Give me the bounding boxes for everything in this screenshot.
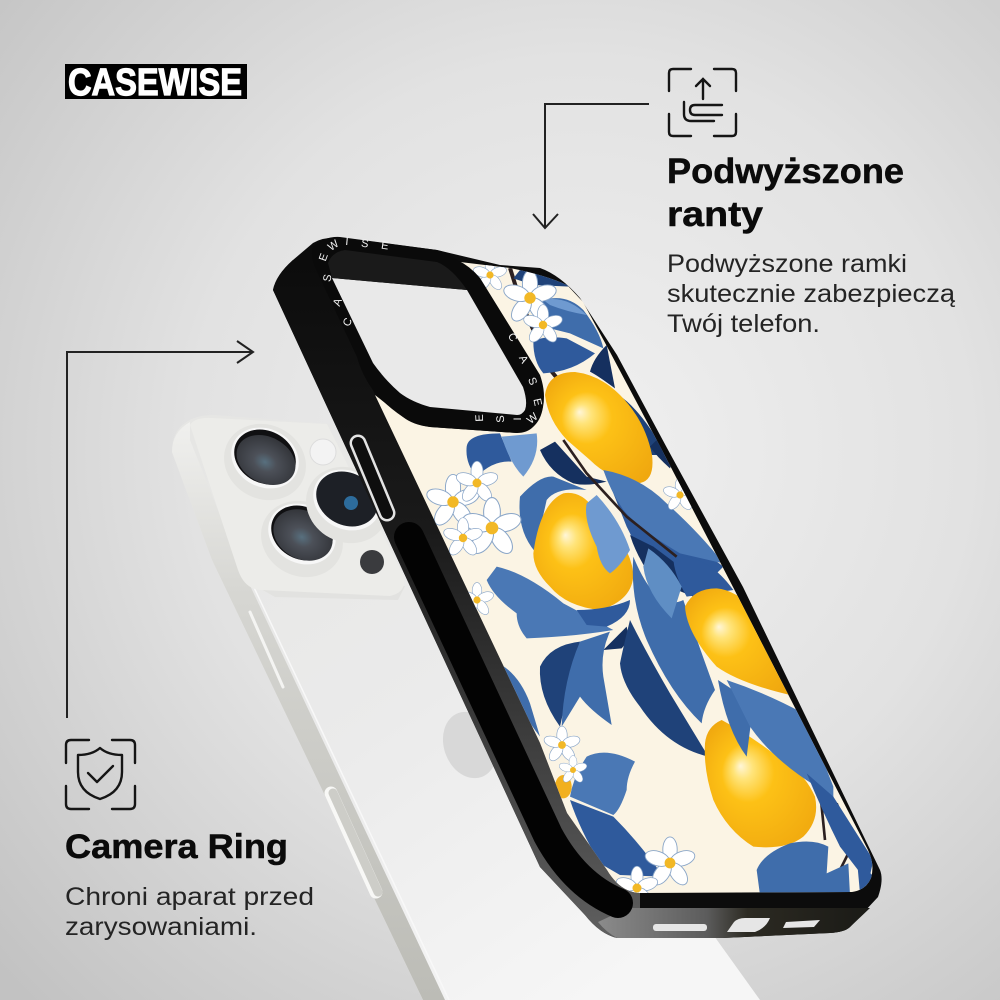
bottom wall	[598, 908, 870, 938]
case shell	[273, 238, 882, 938]
branches	[508, 268, 558, 378]
ring engraving: S	[321, 274, 335, 283]
icon: raised edge	[669, 69, 736, 136]
brand logo: CASEWISE	[68, 62, 242, 104]
ring engraving: C	[505, 331, 519, 344]
camera plateau	[190, 418, 404, 596]
ring engraving	[317, 236, 544, 427]
ring engraving: E	[317, 252, 331, 263]
lens top	[211, 410, 319, 514]
silver phone	[172, 410, 760, 1000]
lemon 3	[685, 588, 790, 695]
bottom ports	[653, 918, 820, 932]
apple logo	[434, 704, 506, 786]
lemon 1	[545, 372, 652, 483]
text: raised edges description: Twój telefon.	[667, 310, 820, 338]
phone side edge	[172, 422, 445, 1000]
lens opening	[332, 278, 526, 415]
text: camera ring description: zarysowaniami.	[65, 913, 257, 941]
lemon 2	[533, 493, 633, 610]
ring engraving: S	[495, 415, 507, 423]
flash	[310, 439, 336, 465]
lemon artwork	[375, 262, 872, 893]
ring engraving: A	[516, 353, 530, 366]
heading: raised edges: ranty	[667, 195, 764, 234]
ring engraving: I	[345, 236, 349, 248]
camera plateau shadow	[245, 580, 405, 600]
ring engraving: A	[331, 296, 345, 308]
ring inner shadow	[328, 250, 467, 290]
ring engraving: E	[474, 414, 486, 422]
text: camera ring description: Chroni aparat przed	[65, 883, 314, 911]
lidar	[360, 550, 384, 574]
ring engraving: C	[341, 316, 355, 329]
middle leaves and lemons	[466, 433, 790, 757]
icon: shield	[66, 740, 135, 809]
side button lower	[331, 793, 378, 892]
lens bottom	[248, 487, 356, 591]
side slot	[409, 537, 618, 903]
arrow: to camera ring	[67, 341, 253, 718]
phone body	[172, 415, 760, 1000]
ring engraving: E	[530, 397, 544, 407]
text: raised edges description: Podwyższone ramki	[667, 250, 907, 278]
side button upper	[250, 612, 283, 687]
left bumper band	[273, 260, 640, 938]
ring engraving: E	[380, 240, 389, 252]
ring engraving: W	[326, 238, 342, 254]
ring engraving: I	[512, 417, 524, 421]
camera ring	[312, 236, 544, 433]
heading: camera ring: Camera Ring	[65, 828, 288, 866]
side edge highlight	[241, 560, 449, 1000]
heading: raised edges: Podwyższone	[667, 152, 904, 191]
lower leaves and lemon 4	[555, 680, 873, 895]
side button	[358, 443, 387, 513]
phone case	[273, 236, 890, 938]
arrow: to raised edges	[533, 104, 649, 228]
cream backdrop	[375, 262, 872, 893]
ring engraving: W	[525, 410, 541, 427]
text: raised edges description: skutecznie zabezpieczą	[667, 280, 955, 308]
ring engraving: S	[525, 376, 539, 387]
lens right	[293, 453, 401, 557]
blossoms	[425, 258, 698, 909]
upper leaves	[513, 270, 667, 455]
ring engraving: S	[360, 238, 369, 250]
